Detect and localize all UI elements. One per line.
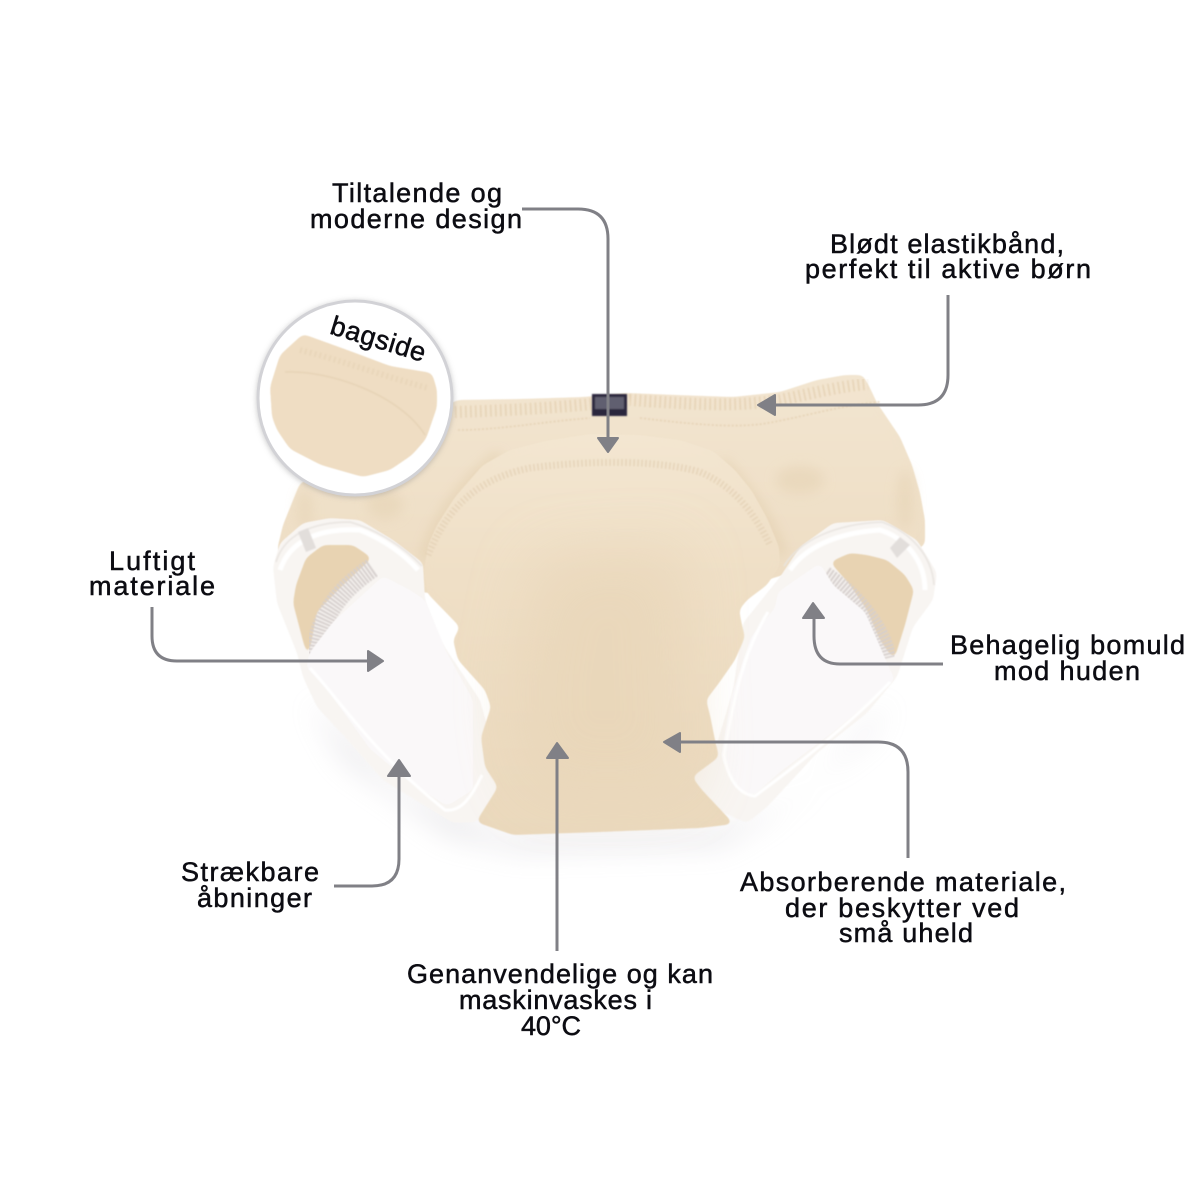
back body of pants	[277, 375, 925, 600]
callout: Blødt elastikbånd: Blødt elastikbånd,	[830, 229, 1064, 259]
arrow: to waistband	[758, 295, 948, 415]
callout: Absorberende materiale	[664, 733, 1066, 948]
shadow beside front dome	[424, 455, 782, 560]
product: training underpants	[273, 375, 937, 835]
arrow: to left panel	[152, 607, 383, 671]
right mesh seam	[825, 575, 888, 658]
front panel	[424, 434, 780, 835]
callout: Absorberende materiale: der beskytter ved	[785, 893, 1019, 923]
arrow: to front panel	[547, 743, 568, 951]
right white panel	[721, 563, 895, 796]
arrow: to leg opening	[334, 760, 410, 886]
fabric folds	[298, 466, 913, 530]
left panel hem	[310, 668, 482, 810]
left white panel	[306, 576, 473, 806]
callout: Genanvendelige: Genanvendelige og kan	[407, 959, 713, 989]
callout: Tiltalende og moderne design: moderne design	[310, 204, 522, 234]
callout: Genanvendelige	[407, 743, 713, 1041]
callout: Behagelig bomuld: Behagelig bomuld	[950, 630, 1185, 660]
callout: Strækbare åbninger	[181, 760, 410, 913]
right panel hem	[724, 612, 890, 796]
left opening	[293, 545, 372, 660]
arrow: to waist seam	[522, 209, 618, 452]
woven label	[592, 394, 627, 416]
drop shadow under product	[310, 700, 890, 850]
front panel top seam	[428, 462, 770, 555]
right band seams	[784, 522, 934, 590]
callout: Genanvendelige: maskinvaskes i	[459, 985, 652, 1015]
callout: Blødt elastikbånd	[758, 229, 1091, 415]
callout: Strækbare åbninger: åbninger	[197, 883, 312, 913]
left mesh seam	[315, 568, 372, 655]
callout: Tiltalende og moderne design	[310, 178, 618, 452]
front panel centre shading	[515, 550, 690, 790]
inset back-view panel	[270, 334, 437, 477]
right opening	[830, 553, 914, 660]
right leg band	[690, 520, 937, 823]
callout: Luftigt materiale: Luftigt	[109, 546, 195, 576]
callout: Luftigt materiale	[89, 546, 383, 671]
callout: Behagelig bomuld: mod huden	[994, 656, 1140, 686]
callout: Tiltalende og moderne design: Tiltalende og	[332, 178, 502, 208]
callout: Luftigt materiale: materiale	[89, 571, 215, 601]
arrow: to right panel	[803, 603, 943, 664]
inset circle: bagside	[258, 301, 452, 495]
callout: Absorberende materiale: Absorberende materiale,	[740, 867, 1066, 897]
inset label: bagside	[327, 310, 430, 368]
callout: Strækbare åbninger: Strækbare	[181, 857, 319, 887]
callout: Absorberende materiale: små uheld	[839, 918, 973, 948]
left leg band	[273, 518, 505, 823]
waistband gathers	[455, 384, 880, 430]
callout: Behagelig bomuld	[803, 603, 1185, 686]
callout: Blødt elastikbånd: perfekt til aktive børn	[805, 254, 1091, 284]
callout: Genanvendelige: 40°C	[521, 1011, 581, 1041]
left band seams	[276, 522, 422, 570]
arrow: to absorbent core	[664, 733, 908, 858]
